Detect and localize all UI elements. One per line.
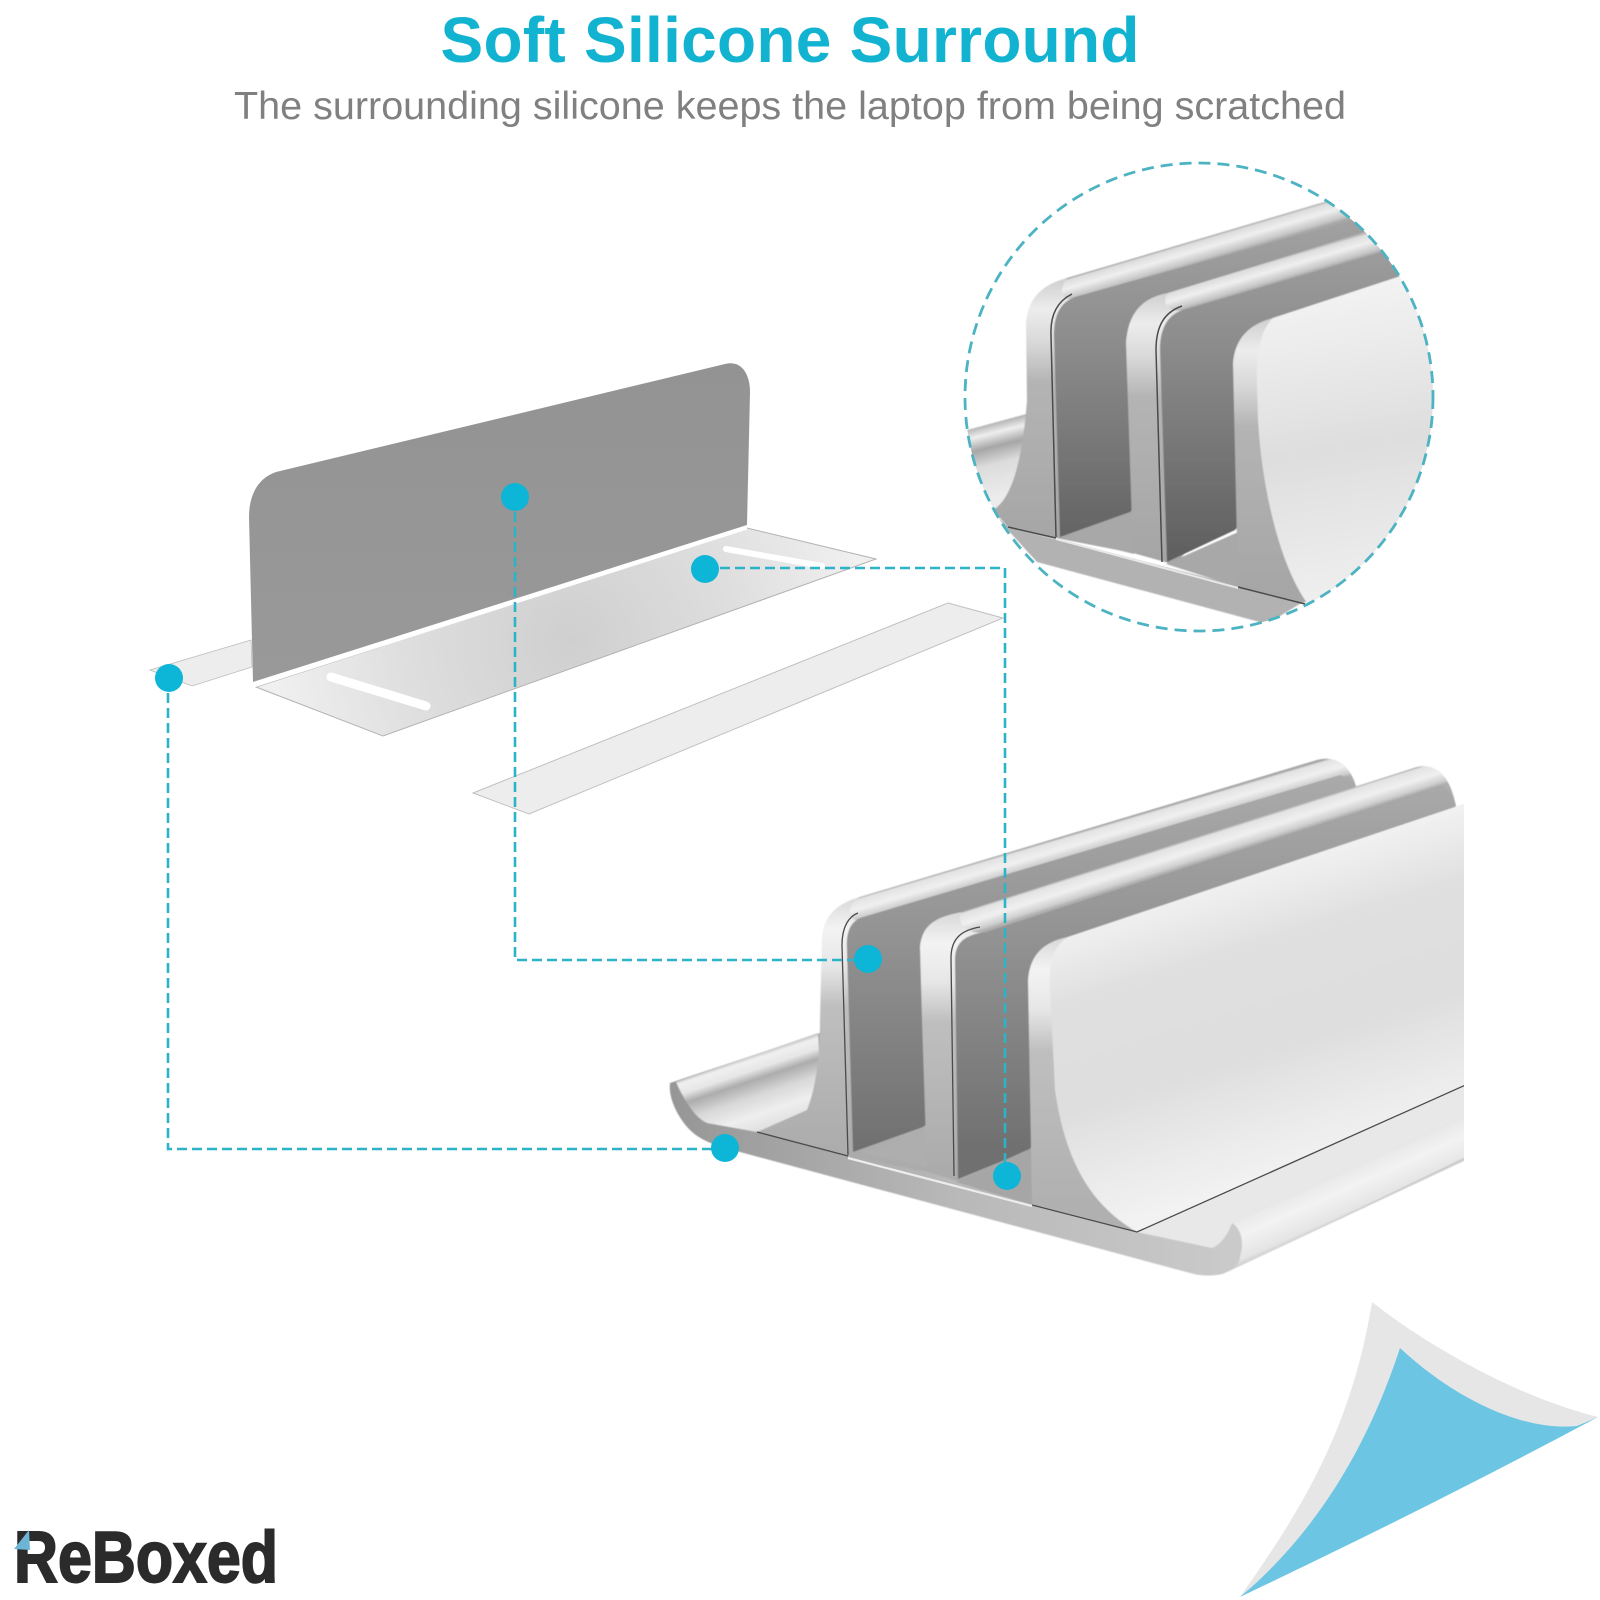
slot left: [331, 677, 426, 706]
gray upright panel: [249, 363, 750, 682]
ReBoxed logo: [14, 1518, 278, 1598]
vertical laptop stand: [670, 759, 1470, 1276]
stand: first floor: [863, 1132, 927, 1167]
stand: right lip: [1227, 1114, 1470, 1272]
stand: tray in front: [1137, 1083, 1470, 1248]
silicone foot: [256, 528, 876, 736]
stand: third upright: [1027, 936, 1134, 1230]
stand: first gray panel: [847, 775, 1356, 1152]
curl: gray paper back: [1240, 1302, 1598, 1597]
circle: first gray panel: [1054, 220, 1365, 538]
stand: white front face: [1050, 802, 1470, 1232]
circle: second top band: [1165, 232, 1381, 311]
stand: first upright: [760, 897, 926, 1171]
circle: first upright: [995, 201, 1326, 550]
stand: left lip: [676, 1033, 822, 1132]
logo blue fold: [14, 1530, 30, 1550]
marker dots: [155, 483, 1021, 1190]
slot right: [726, 549, 822, 566]
dashed connector: panel: [515, 497, 868, 960]
curl: blue underside: [1240, 1348, 1598, 1597]
stand: base highlight: [848, 1158, 1032, 1206]
circle: first top band: [1062, 202, 1352, 299]
page curl corner: [1240, 1302, 1598, 1597]
dashed connector: foot: [705, 568, 1005, 1176]
logo wordmark: ReBoxed: [14, 1518, 278, 1598]
circle: second upright: [1125, 232, 1366, 564]
circle: first floor: [1121, 550, 1134, 554]
dashed connector: rear strip: [168, 678, 725, 1149]
circle: second floor: [1166, 532, 1238, 586]
exploded silicone part: [150, 363, 876, 736]
circle: white face: [1257, 263, 1440, 603]
stand: base silhouette: [669, 1032, 1464, 1276]
circle: rear lip: [967, 414, 1026, 508]
subtitle: The surrounding silicone keeps the laptop from being scratched: [234, 85, 1346, 128]
circle: dashed outline: [965, 163, 1433, 631]
stand: second top band: [960, 766, 1456, 933]
panel fold highlight: [254, 528, 747, 686]
separate long silicone strip: [473, 603, 1003, 814]
stand: first top band: [850, 759, 1356, 920]
circle: base highlight: [1056, 539, 1238, 588]
title: Soft Silicone Surround: [440, 4, 1140, 76]
stand: second floor: [956, 1150, 1040, 1207]
magnified circle detail: [960, 163, 1440, 631]
small rear silicone strip: [150, 640, 252, 686]
circle: third upright: [1232, 318, 1306, 603]
circle: panel edge lines and seams: [1008, 294, 1305, 604]
circle: second gray panel: [1160, 252, 1400, 562]
stand: second upright: [919, 912, 1031, 1180]
circle: base strip: [998, 518, 1302, 622]
stand: second gray panel: [955, 785, 1456, 1179]
stand: panel edge lines and seams: [757, 913, 1470, 1232]
